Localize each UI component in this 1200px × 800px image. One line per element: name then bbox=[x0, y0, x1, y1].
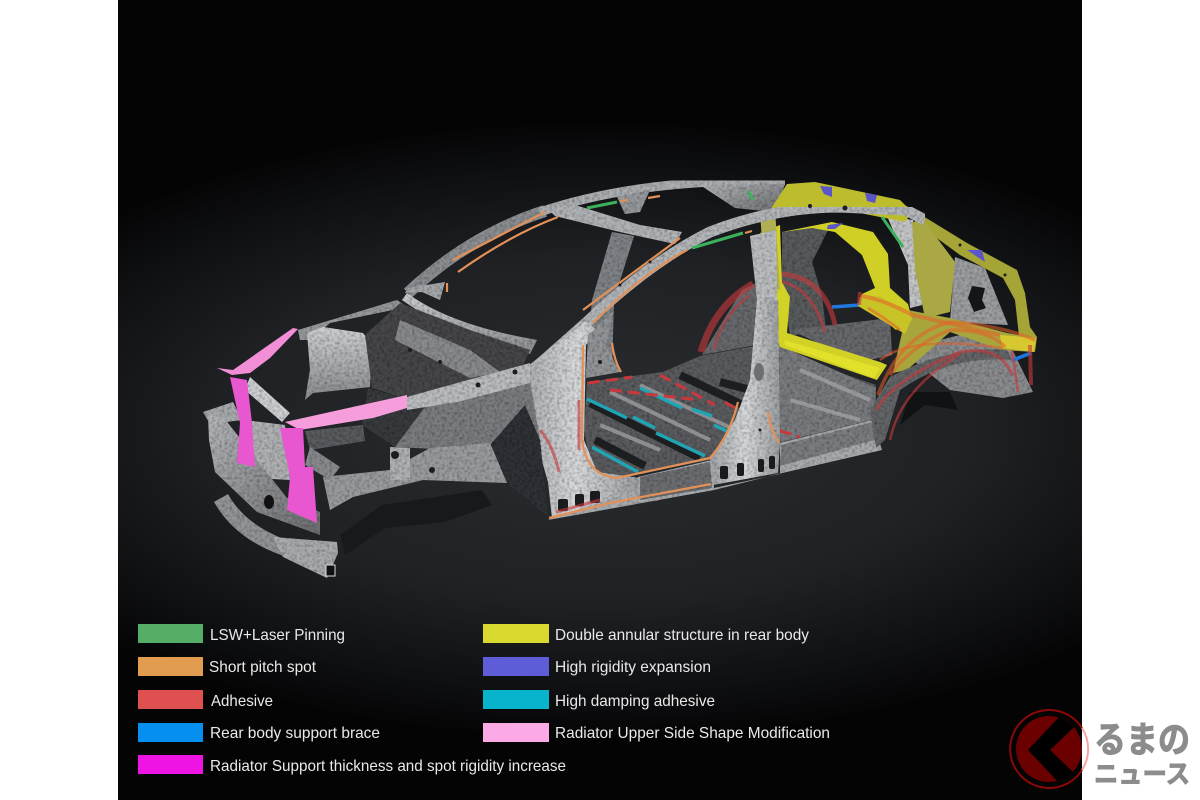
legend: High damping adhesive bbox=[483, 690, 715, 710]
legend: Radiator Upper Side bbox=[483, 723, 830, 742]
front lower frame rail bbox=[203, 377, 507, 510]
logo text bbox=[1094, 719, 1190, 789]
legend: High rigidity expansion bbox=[483, 657, 711, 676]
suspension subframe bbox=[340, 490, 492, 555]
legend bbox=[138, 624, 830, 775]
spot marks bbox=[391, 204, 1006, 473]
rear body support brace blue bbox=[832, 305, 1031, 360]
LSW laser pinning green lines bbox=[587, 191, 903, 248]
legend: Rear body support brace: Rear body support brace bbox=[210, 725, 380, 742]
rear quarter inner panel bbox=[887, 216, 1033, 398]
legend: Adhesive bbox=[138, 690, 273, 710]
high rigidity expansion purple bbox=[820, 186, 985, 262]
tow tube opening bbox=[326, 565, 335, 576]
sill openings bbox=[558, 363, 775, 511]
legend: Adhesive: Adhesive bbox=[211, 693, 273, 710]
legend: Short pitch spot: Short pitch spot bbox=[209, 659, 317, 676]
adhesive red bands bbox=[540, 274, 1031, 512]
legend: Radiator Support thickness bbox=[138, 755, 566, 775]
legend: High rigidity expansion: High rigidity expansion bbox=[555, 659, 711, 676]
high damping adhesive teal strips bbox=[587, 388, 760, 472]
floor adhesive red dashes bbox=[588, 375, 835, 500]
short pitch spot orange lines bbox=[447, 196, 779, 518]
radiator upper pink bbox=[217, 328, 407, 430]
floor cross members bbox=[590, 375, 770, 466]
watermark logo bbox=[1010, 710, 1190, 789]
legend: Rear body support brace bbox=[138, 723, 380, 742]
logo text: ニュース bbox=[1094, 759, 1190, 789]
rear suspension dark part bbox=[900, 392, 958, 425]
logo disc with chevron bbox=[1010, 710, 1088, 788]
near roof rail bbox=[512, 207, 925, 520]
legend: Radiator Support thickness: Radiator Support thickness and spot rigidity increase bbox=[210, 758, 566, 775]
legend: Radiator Upper Side: Radiator Upper Side Shape Modification bbox=[555, 725, 830, 742]
radiator support magenta bbox=[230, 377, 317, 523]
legend: LSW+Laser Pinning bbox=[138, 624, 345, 644]
legend: LSW+Laser Pinning: LSW+Laser Pinning bbox=[210, 627, 345, 644]
car body structure bbox=[203, 181, 1037, 578]
front engine bay bbox=[298, 300, 548, 516]
logo text: るまの bbox=[1094, 719, 1190, 760]
floor highlights bbox=[600, 370, 870, 450]
legend: Double annular structure: Double annular structure in rear body bbox=[555, 627, 809, 644]
orange rear fender overlay bbox=[862, 296, 1035, 395]
legend: Double annular structure bbox=[483, 624, 809, 644]
front bumper beams bbox=[208, 415, 338, 578]
rear interior and floor pan bbox=[584, 222, 892, 478]
rear quarter access hole bbox=[968, 286, 986, 312]
bumper hole bbox=[264, 495, 274, 509]
far side body structure bbox=[402, 181, 785, 372]
double annular structure yellow bbox=[760, 182, 1037, 380]
legend: High damping adhesive: High damping adhesive bbox=[555, 693, 715, 710]
legend: Short pitch spot bbox=[138, 657, 317, 676]
rear wheel arch bbox=[870, 349, 1012, 448]
